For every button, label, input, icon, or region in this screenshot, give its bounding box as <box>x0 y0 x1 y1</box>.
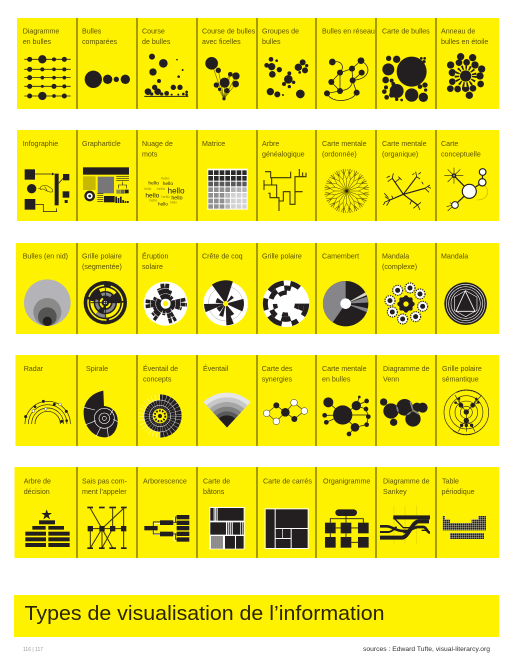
panel: Carte mentale (ordonnée) <box>316 130 376 221</box>
heading: Mandala (complexe): (complexe) <box>382 263 417 271</box>
icon: treemap <box>265 508 309 549</box>
panel: Table périodique <box>436 467 499 558</box>
panel: Grille polaire (segmentée) <box>77 243 137 334</box>
heading: Spirale: Spirale <box>86 365 108 373</box>
panel: Sais pas comment l'appeler <box>77 467 137 558</box>
icon: matrix <box>207 169 248 210</box>
heading: Organigramme: Organigramme <box>323 478 370 486</box>
panel: Bulles (en nid) <box>16 243 77 334</box>
icon: word cloud: hello <box>171 196 183 202</box>
heading: Diagramme de Sankey: Sankey <box>383 488 407 496</box>
heading: Grille polaire (segmentée): (segmentée) <box>82 263 122 271</box>
panel: Arborescence <box>137 467 197 558</box>
heading: Mandala (complexe): Mandala <box>382 252 409 260</box>
heading: Carte des synergies: synergies <box>262 376 293 384</box>
panel: Groupes de bulles <box>257 18 316 109</box>
heading: Nuage de mots: Nuage de <box>142 140 173 148</box>
heading: Course de bulles avec ficelles: Course de bulles <box>202 28 255 36</box>
icon: bubble rows <box>24 55 71 100</box>
icon: radial mind map <box>325 169 369 213</box>
icon: word cloud: hello <box>170 200 177 204</box>
heading: Diagramme de Venn: Venn <box>383 376 399 384</box>
heading: Course de bulles: Course <box>142 28 165 36</box>
icon: word cloud: hello <box>145 192 160 199</box>
icon: family tree <box>264 169 306 211</box>
heading: Éruption solaire: Éruption <box>142 252 168 260</box>
heading: Carte mentale (ordonnée): (ordonnée) <box>322 150 357 158</box>
panel: Arbre de décision <box>14 467 77 558</box>
panel: Diagramme de Venn <box>376 355 436 446</box>
icon: Venn diagram <box>380 398 428 427</box>
panel: Diagramme de Sankey <box>376 467 436 558</box>
panel: Organigramme <box>316 467 376 558</box>
panel: Bulles en réseau <box>316 18 376 109</box>
icon: fan chart <box>203 393 251 427</box>
heading: Bulles (en nid): Bulles (en nid) <box>23 252 68 260</box>
icon: decision tree <box>25 509 70 547</box>
heading: Arborescence: Arborescence <box>143 478 187 486</box>
heading: Anneau de bulles en étoile: bulles en étoile <box>441 38 488 46</box>
heading: Carte mentale (organique): (organique) <box>382 150 418 158</box>
heading: Bulles en réseau: Bulles en réseau <box>322 28 375 36</box>
heading: Arbre de décision: Arbre de <box>24 478 51 486</box>
icon: bar map <box>209 507 245 549</box>
panel: Carte conceptuelle <box>436 130 499 221</box>
sources: sources : Edward Tufte, visual-literarcy.org <box>363 647 490 653</box>
panel: Carte de bâtons <box>197 467 257 558</box>
icon: compared bubbles <box>85 71 130 88</box>
heading: Grille polaire (segmentée): Grille polaire <box>82 252 122 260</box>
panel: Matrice <box>197 130 257 221</box>
heading: Diagramme de Venn: Diagramme de <box>383 365 430 373</box>
heading: Carte de bâtons: bâtons <box>203 488 225 496</box>
panel: Carte des synergies <box>257 355 316 446</box>
panel: Éventail de concepts <box>137 355 197 446</box>
heading: Carte mentale (ordonnée): Carte mentale <box>322 140 367 148</box>
heading: Groupes de bulles: Groupes de <box>262 28 299 36</box>
heading: Carte conceptuelle: Carte <box>441 140 458 148</box>
title banner <box>14 595 499 637</box>
heading: Mandala: Mandala <box>441 252 468 260</box>
heading: Carte de bulles: Carte de bulles <box>382 28 430 36</box>
icon: bubble race <box>144 54 188 96</box>
heading: Grille polaire sémantique: sémantique <box>442 376 479 384</box>
panel: Carte de carrés <box>257 467 316 558</box>
heading: Diagramme en bulles: en bulles <box>23 38 52 46</box>
icon: periodic table <box>443 516 486 539</box>
panel: Grille polaire sémantique <box>436 355 499 446</box>
heading: Course de bulles: de bulles <box>142 38 171 46</box>
panel: Éventail <box>197 355 257 446</box>
icon: bubble map <box>382 56 428 102</box>
icon: word cloud: hello <box>168 187 185 196</box>
heading: Table périodique: Table <box>442 478 459 486</box>
heading: Éventail: Éventail <box>203 364 229 373</box>
heading: Sais pas comment l'appeler: ment l’appeler <box>82 488 127 496</box>
panel: Bulles comparées <box>77 18 137 109</box>
panel: Carte mentale (organique) <box>376 130 436 221</box>
icon: radar <box>24 400 70 424</box>
icon: word cloud <box>144 175 185 207</box>
icon: word cloud: hello <box>163 181 173 187</box>
icon: bubble mind map <box>322 396 371 436</box>
icon: complex mandala <box>385 283 428 324</box>
icon: bubbles with strings <box>205 57 240 100</box>
icon: word cloud: hello <box>158 202 168 207</box>
icon: concept map <box>444 168 488 211</box>
icon: pie chart <box>323 281 368 326</box>
heading: Carte mentale (organique): Carte mentale <box>382 140 427 148</box>
heading: Carte de bâtons: Carte de <box>203 478 230 486</box>
panel: Carte de bulles <box>376 18 436 109</box>
icon: word cloud: hello <box>144 187 152 191</box>
heading: Camembert: Camembert <box>322 252 359 260</box>
heading: Radar: Radar <box>24 365 44 373</box>
heading: Éventail de concepts: Éventail de <box>143 365 178 373</box>
panel: Nuage de mots <box>137 130 197 221</box>
heading: Carte conceptuelle: conceptuelle <box>441 150 481 158</box>
heading: Diagramme en bulles: Diagramme <box>23 28 59 36</box>
heading: Arbre généalogique: Arbre <box>262 140 279 148</box>
icon: polar grid <box>263 280 309 327</box>
heading: Éventail de concepts: concepts <box>143 376 172 384</box>
icon: tree diagram <box>144 515 189 542</box>
icon: unnamed network <box>87 507 127 549</box>
panel: Course de bulles <box>137 18 197 109</box>
heading: Arbre de décision: décision <box>24 488 50 496</box>
icon: word cloud: hello <box>157 186 166 191</box>
heading: Diagramme de Sankey: Diagramme de <box>383 478 430 486</box>
icon: bubble network <box>324 57 368 101</box>
icon: graph article <box>83 167 129 203</box>
heading: Carte des synergies: Carte des <box>262 365 292 373</box>
heading: Infographie: Infographie <box>23 140 58 148</box>
panel: Infographie <box>17 130 77 221</box>
panel: Grapharticle <box>77 130 137 221</box>
panel: Anneau de bulles en étoile <box>436 18 499 109</box>
heading: Matrice: Matrice <box>202 140 225 148</box>
panel: Diagramme en bulles <box>17 18 77 109</box>
icon: concept fan <box>144 394 182 438</box>
icon: semantic polar grid <box>444 390 489 435</box>
heading: Course de bulles avec ficelles: avec ficelles <box>202 38 241 46</box>
page numbers: 116 | 117 <box>23 647 43 653</box>
panel: Crête de coq <box>197 243 257 334</box>
panel: Éruption solaire <box>137 243 197 334</box>
panel: Spirale <box>77 355 137 446</box>
heading: Bulles comparées: comparées <box>82 38 118 46</box>
heading: Carte mentale en bulles: Carte mentale <box>322 365 367 373</box>
icon: bubble groups <box>264 57 308 98</box>
panel: Mandala <box>436 243 499 334</box>
title: Types de visualisation de l’information <box>24 603 384 625</box>
panel: Arbre généalogique <box>257 130 316 221</box>
icon: infographic <box>25 169 69 212</box>
panel: Grille polaire <box>257 243 316 334</box>
heading: Crête de coq: Crête de coq <box>202 252 243 260</box>
icon: organic mind map <box>383 172 431 210</box>
heading: Grille polaire: Grille polaire <box>262 252 302 260</box>
icon: coxcomb chart <box>203 279 248 326</box>
panel: Radar <box>16 355 77 446</box>
icon: word cloud: hello <box>161 175 170 180</box>
heading: Sais pas comment l'appeler: Sais pas com- <box>82 478 127 486</box>
heading: Grille polaire sémantique: Grille polaire <box>442 365 482 373</box>
heading: Éruption solaire: solaire <box>142 263 163 271</box>
icon: org chart <box>325 509 369 548</box>
icon: word cloud: hello <box>149 199 157 203</box>
heading: Nuage de mots: mots <box>142 150 158 158</box>
icon: synergy map <box>263 399 308 425</box>
heading: Bulles comparées: Bulles <box>82 28 101 36</box>
icon: word cloud: hello <box>148 181 159 187</box>
icon: star bubble ring <box>447 53 485 99</box>
panel: Mandala (complexe) <box>376 243 436 334</box>
icon: mandala <box>444 282 487 325</box>
icon: solar eruption <box>144 282 188 326</box>
icon: nested bubbles <box>24 279 71 326</box>
icon: word cloud: hello <box>161 194 171 199</box>
heading: Table périodique: périodique <box>442 488 475 496</box>
icon: nautilus spiral <box>84 391 118 437</box>
panel: Camembert <box>316 243 376 334</box>
heading: Carte mentale en bulles: en bulles <box>322 376 351 384</box>
panel: Course de bulles avec ficelles <box>197 18 257 109</box>
heading: Arbre généalogique: généalogique <box>262 150 305 158</box>
icon: segmented polar grid <box>84 281 127 324</box>
panel: Carte mentale en bulles <box>316 355 376 446</box>
heading: Grapharticle: Grapharticle <box>82 140 121 148</box>
icon: Sankey diagram <box>380 505 430 544</box>
heading: Carte de carrés: Carte de carrés <box>263 478 312 486</box>
heading: Groupes de bulles: bulles <box>262 38 281 46</box>
heading: Anneau de bulles en étoile: Anneau de <box>441 28 475 36</box>
